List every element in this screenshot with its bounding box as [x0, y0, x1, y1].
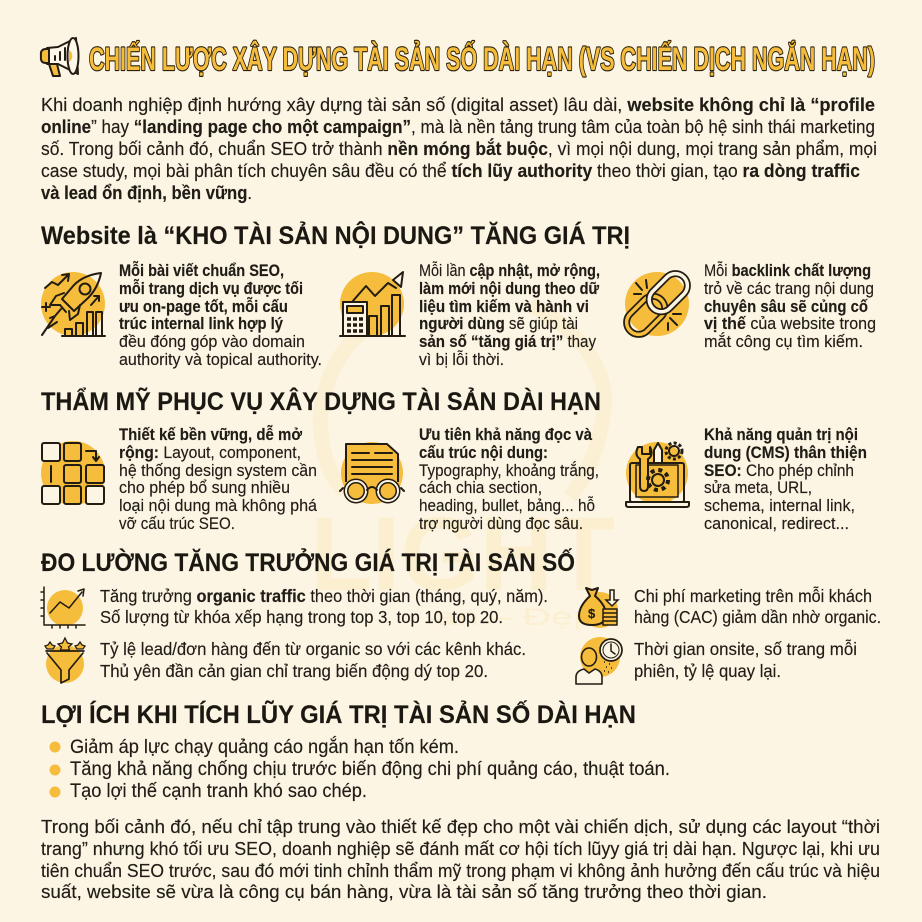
watermark logo: LIGHT	[310, 496, 615, 613]
text: quản trị CMS	[704, 425, 867, 533]
icon: money bag and coins: $	[588, 606, 596, 621]
closing paragraph: Trong bối cảnh đó, nếu chỉ tập trung vào thiết kế đẹp cho một vài chiến dịch, sử dụng các layout “thời	[41, 816, 880, 837]
intro paragraph: số. Trong bối cảnh đó, chuẩn SEO trở thành nền móng bắt buộc, vì mọi nội dung, mọi trang sản phẩm, mọi	[41, 138, 877, 159]
text: bài viết chuẩn SEO	[119, 261, 322, 369]
text: khả năng đọc: trợ người dùng đọc sâu.	[419, 514, 583, 533]
watermark logo: an – Đẹp	[435, 604, 595, 631]
text: thiết kế bền vững	[119, 425, 318, 533]
icon: document and glasses	[340, 442, 404, 504]
text: khả năng đọc: Typography, khoảng trắng,	[419, 461, 599, 480]
closing paragraph	[41, 816, 880, 902]
icon: megaphone	[41, 38, 78, 76]
heading: kho tài sản: Website là “KHO TÀI SẢN NỘI DUNG” TĂNG GIÁ TRỊ	[41, 220, 630, 250]
icon: calculator and growth chart	[340, 272, 405, 336]
text: khả năng đọc: heading, bullet, bảng... hỗ	[419, 496, 595, 515]
text: backlink chất lượng: trỏ về các trang nội dung	[704, 279, 874, 298]
text: cập nhật nội dung: liệu tìm kiếm và hành vi	[419, 297, 589, 316]
text: cập nhật nội dung: Mỗi lần cập nhật, mở rộng,	[419, 261, 600, 280]
text: backlink chất lượng: vị thế của website trong	[704, 314, 876, 333]
icon: laptop with tools	[626, 442, 689, 507]
text: backlink chất lượng: Mỗi backlink chất lượng	[704, 261, 871, 280]
heading: đo lường: ĐO LƯỜNG TĂNG TRƯỞNG GIÁ TRỊ TÀI SẢN SỐ	[41, 547, 575, 577]
text: khả năng đọc: cấu trúc nội dung:	[419, 443, 548, 462]
text: backlink chất lượng: mắt công cụ tìm kiếm.	[704, 332, 863, 351]
heading: thẩm mỹ: THẨM MỸ PHỤC VỤ XÂY DỰNG TÀI SẢN DÀI HẠN	[41, 386, 601, 416]
bullet list: lợi ích: Tạo lợi thế cạnh tranh khó sao chép.	[70, 780, 367, 802]
icon: funnel with stars	[45, 638, 85, 683]
closing paragraph: tiên chuẩn SEO trước, sau đó mới tinh chỉnh thẩm mỹ trong phạm vi không ảnh hưởng đến cấu trúc và hiệu	[41, 860, 880, 881]
text: bài viết chuẩn SEO: Mỗi bài viết chuẩn SEO,	[119, 261, 284, 280]
intro paragraph: và lead ổn định, bền vững.	[41, 182, 252, 203]
text: thiết kế bền vững: hệ thống design system cần	[119, 461, 317, 480]
heading: lợi ích: LỢI ÍCH KHI TÍCH LŨY GIÁ TRỊ TÀI SẢN SỐ DÀI HẠN	[41, 699, 636, 729]
text: thiết kế bền vững: vỡ cấu trúc SEO.	[119, 514, 235, 533]
text: quản trị CMS: sửa meta, URL,	[704, 478, 812, 497]
text: thời gian onsite: phiên, tỷ lệ quay lại.	[634, 661, 781, 681]
bullet list: lợi ích: Tăng khả năng chống chịu trước biến động chi phí quảng cáo, thuật toán.	[70, 758, 670, 780]
icon: layout grid	[41, 441, 105, 505]
text: cập nhật nội dung	[419, 261, 600, 369]
text: cập nhật nội dung: làm mới nội dung theo dữ	[419, 279, 600, 298]
text: thiết kế bền vững: rộng: Layout, component,	[119, 443, 301, 462]
text: thiết kế bền vững: loại nội dung mà không phá	[119, 496, 318, 515]
text: chi phí CAC	[634, 585, 881, 627]
watermark logo	[310, 305, 615, 631]
text: thời gian onsite: Thời gian onsite, số trang mỗi	[634, 638, 857, 659]
text: cập nhật nội dung: người dùng sẽ giúp tài	[419, 314, 578, 333]
icon: line chart	[41, 587, 85, 628]
text: bài viết chuẩn SEO: authority và topical authority.	[119, 350, 322, 369]
text: bài viết chuẩn SEO: ưu on-page tốt, mỗi cấu	[119, 297, 288, 316]
text: chi phí CAC: Chi phí marketing trên mỗi khách	[634, 585, 872, 606]
bullet list: lợi ích: Giảm áp lực chạy quảng cáo ngắn hạn tốn kém.	[70, 735, 459, 758]
text: thời gian onsite	[634, 638, 857, 681]
intro paragraph: Khi doanh nghiệp định hướng xây dựng tài sản số (digital asset) lâu dài, website không chỉ là “profile	[41, 94, 875, 115]
text: backlink chất lượng: chuyên sâu sẽ củng cố	[704, 297, 868, 316]
text: lead đơn hàng: Thủ yên đần cản gian chỉ trang biến động dý top 20.	[100, 661, 488, 681]
text: quản trị CMS: dung (CMS) thân thiện	[704, 443, 867, 462]
icon: rocket	[41, 272, 105, 336]
intro paragraph: online” hay “landing page cho một campaign”, mà là nền tảng trung tâm của toàn bộ hệ sinh thái marketing	[41, 116, 875, 137]
text: organic traffic	[100, 586, 548, 627]
bullet list: lợi ích	[50, 735, 670, 802]
icon: money bag and coins	[579, 588, 618, 628]
text: chi phí CAC: hàng (CAC) giảm dần nhờ organic.	[634, 607, 881, 627]
text: backlink chất lượng	[704, 261, 876, 351]
text: organic traffic: Tăng trưởng organic traffic theo thời gian (tháng, quý, năm).	[100, 586, 548, 606]
text: khả năng đọc: Ưu tiên khả năng đọc và	[419, 425, 593, 444]
text: organic traffic: Số lượng từ khóa xếp hạng trong top 3, top 10, top 20.	[100, 607, 503, 627]
icon: chain link	[622, 269, 692, 339]
icon: person and clock	[576, 637, 622, 684]
closing paragraph: suất, website sẽ vừa là công cụ bán hàng, vừa là tài sản số tăng trưởng theo thời gian.	[41, 881, 767, 902]
text: khả năng đọc: cách chia section,	[419, 478, 542, 497]
intro paragraph	[41, 94, 877, 203]
text: bài viết chuẩn SEO: đều đóng góp vào domain	[119, 332, 305, 351]
text: bài viết chuẩn SEO: mỗi trang dịch vụ được tối	[119, 279, 303, 298]
text: cập nhật nội dung: vì bị lỗi thời.	[419, 350, 504, 369]
text: quản trị CMS: schema, internal link,	[704, 496, 855, 515]
intro paragraph: case study, mọi bài phân tích chuyên sâu đều có thể tích lũy authority theo thời gian, tạo ra dòng traffic	[41, 160, 860, 181]
text: quản trị CMS: SEO: Cho phép chỉnh	[704, 461, 854, 480]
closing paragraph: trang” nhưng khó tối ưu SEO, doanh nghiệp sẽ đánh mất cơ hội tích lũyy giá trị dài hạn. Ngược lại, khi ưu	[41, 838, 880, 859]
text: lead đơn hàng: Tỷ lệ lead/đơn hàng đến từ organic so với các kênh khác.	[100, 639, 526, 659]
text: cập nhật nội dung: sản số “tăng giá trị” thay	[419, 332, 597, 351]
text: thiết kế bền vững: cho phép bổ sung nhiều	[119, 478, 290, 497]
text: quản trị CMS: canonical, redirect...	[704, 514, 849, 533]
text: khả năng đọc	[419, 425, 599, 533]
text: lead đơn hàng	[100, 639, 526, 681]
text: bài viết chuẩn SEO: trúc internal link hợp lý	[119, 314, 284, 333]
text: quản trị CMS: Khả năng quản trị nội	[704, 425, 858, 444]
text: thiết kế bền vững: Thiết kế bền vững, dễ mở	[119, 425, 302, 444]
